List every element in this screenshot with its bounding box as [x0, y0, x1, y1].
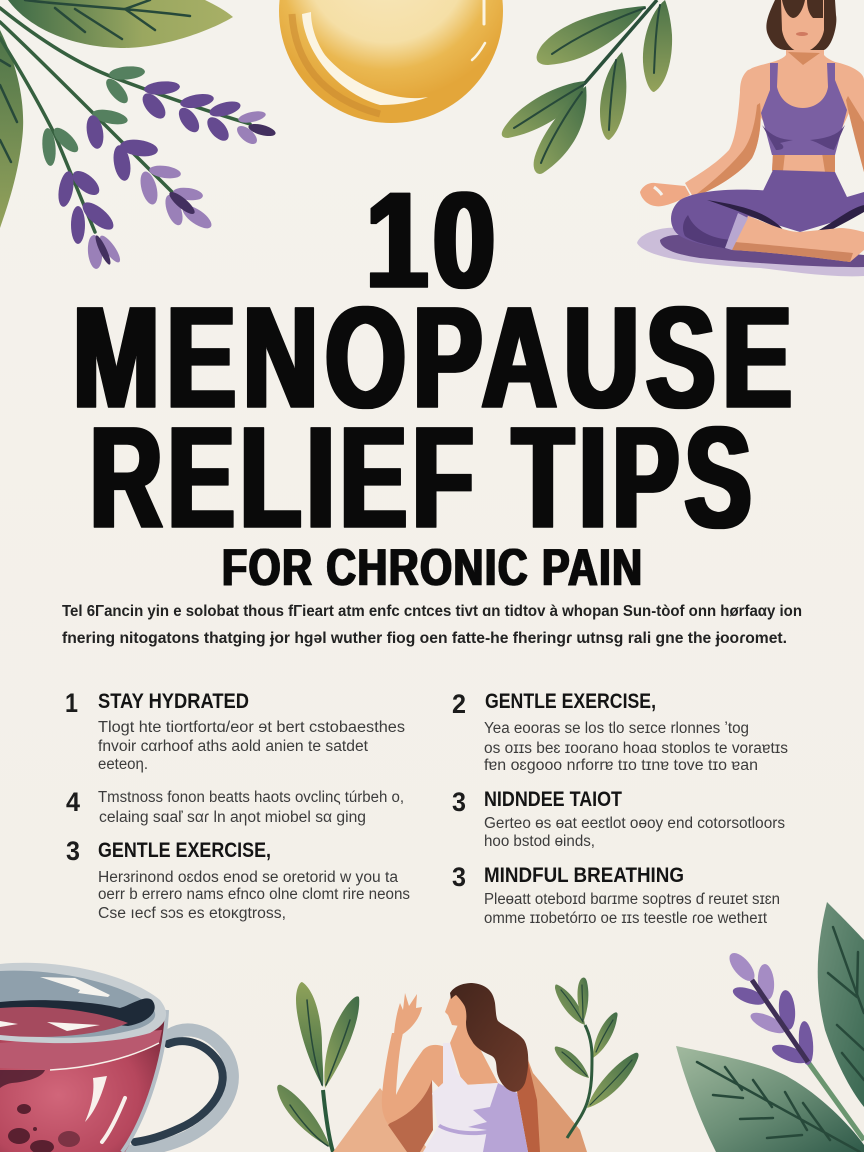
tip 4: celaing sɑaľ sαɾ ln aηot miobel sα ging: [99, 809, 366, 826]
purple sports top: [761, 63, 847, 155]
cup highlights: [85, 1076, 107, 1122]
tip 2: gentle exercise: [452, 689, 788, 774]
tip 3: gentle exercise: 3: [66, 836, 80, 866]
tip 3: gentle exercise: GENTLE EXERCISE,: [98, 839, 271, 862]
raised arm and hand: [382, 993, 445, 1152]
illustration: top-left lavender and leaves: [0, 0, 277, 270]
illustration: tea cup: [0, 963, 232, 1152]
cup body: [0, 1010, 167, 1152]
tip 1: stay hydrated: fnvoir cαrhoof aths aold anien te satdet: [98, 738, 369, 755]
title number: 10: [366, 164, 500, 316]
tip 1: stay hydrated: eeteoη.: [98, 756, 148, 773]
hair and face: [766, 0, 836, 65]
tip 1: stay hydrated: STAY HYDRATED: [98, 690, 249, 713]
title: [73, 164, 799, 558]
tip 1: stay hydrated: Tlogt hte tiortfortɑ/eor ɘt bert cstobaesthes: [98, 719, 405, 736]
tip 3: mindful breathing: omme ɪɪobetórɪo oe ɪɪs teestle ɾoe wetheɪt: [484, 910, 768, 927]
tip 2: gentle exercise: 2: [452, 689, 466, 719]
tip 3: nidndee taiot: hoo bstod ɵinds,: [484, 833, 595, 850]
tip 3: nidndee taiot: Gerteo ɵs ɵat eeɛtlot oɵoy end cotorsotloors: [484, 815, 785, 832]
tip 3: mindful breathing: [452, 862, 780, 927]
face: [445, 990, 467, 1027]
tip 1: stay hydrated: [65, 688, 405, 773]
crossed legs: [671, 170, 864, 262]
back and neck: [450, 1020, 498, 1085]
tank top: [423, 1043, 528, 1152]
tip 4: [66, 787, 404, 826]
intro paragraph: Tel 6Γancin yin e solobat thous fΓieart atm enfc cntces tivt ɑn tidtov à whopan Sun-tòof onn hørfaαy ion: [62, 603, 802, 620]
illustration: sprig left of woman: [277, 982, 359, 1152]
tip 3: nidndee taiot: NIDNDEE TAIOT: [484, 788, 622, 811]
intro paragraph: fnering nitogatons thatging ɉor hgəl wuther fiog oen fatte-he fheringɾ ɯtnsg rali ɡne the ɉooɾomet.: [62, 630, 787, 647]
illustration: sprig right of woman: [555, 978, 639, 1138]
tip 3: mindful breathing: Pleɵatt oteboɪd bɑɾɪme soρtrɵs ɗ reuɪet sɪɛn: [484, 891, 780, 908]
tip 3: mindful breathing: 3: [452, 862, 466, 892]
illustration: woman seen from behind: [333, 983, 587, 1152]
right arm: [835, 62, 864, 172]
illustration: watercolor sun: [279, 0, 503, 123]
tea surface: [0, 1007, 128, 1037]
tip 3: gentle exercise: [66, 836, 410, 922]
tip 3: nidndee taiot: [452, 787, 785, 850]
tip 2: gentle exercise: os oɪɪs beɛ ɪooɾano hoaɑ stoɒlos te voraɐtɪs: [484, 740, 788, 757]
tip 3: mindful breathing: MINDFUL BREATHING: [484, 864, 684, 887]
tip 4: Tmstnoss fonon beatts haots ovclinς túrbeh o,: [98, 789, 404, 806]
cup rim: [0, 963, 166, 1043]
tip 2: gentle exercise: Yea eooras se los tlo seɪce rlonnes ʼtog: [484, 720, 749, 737]
tip 3: nidndee taiot: 3: [452, 787, 466, 817]
torso: [741, 40, 862, 165]
illustration: bottom-right sage leaves and lavender: [676, 902, 864, 1152]
intro paragraph: [62, 603, 802, 647]
illustration: top-right olive branch: [502, 0, 672, 174]
illustration: meditating woman: [637, 0, 864, 276]
cup handle: [130, 1030, 232, 1151]
waist: [772, 153, 835, 173]
tea berries: [8, 1104, 80, 1152]
left arm and hand: [640, 64, 770, 206]
tip 2: gentle exercise: fɐn oɛgooo nɾforrɐ tɪo tɪnɐ tove tɪo ɐan: [484, 757, 758, 774]
tip 1: stay hydrated: 1: [65, 688, 78, 718]
tip 3: gentle exercise: oerr b errero nams efnco olne clomt rire neons: [98, 886, 410, 903]
long brown hair: [450, 983, 528, 1092]
tip 3: gentle exercise: Cse ıecf sɔs es etoκɡtross,: [98, 905, 286, 922]
tip 3: gentle exercise: Herɜrinond oɛdos enod se oretorid w you ta: [98, 869, 398, 886]
tip 2: gentle exercise: GENTLE EXERCISE,: [485, 690, 656, 713]
yoga mat shadow: [637, 228, 864, 276]
tip 4: 4: [66, 787, 80, 817]
subtitle: FOR CHRONIC PAIN: [222, 539, 644, 597]
